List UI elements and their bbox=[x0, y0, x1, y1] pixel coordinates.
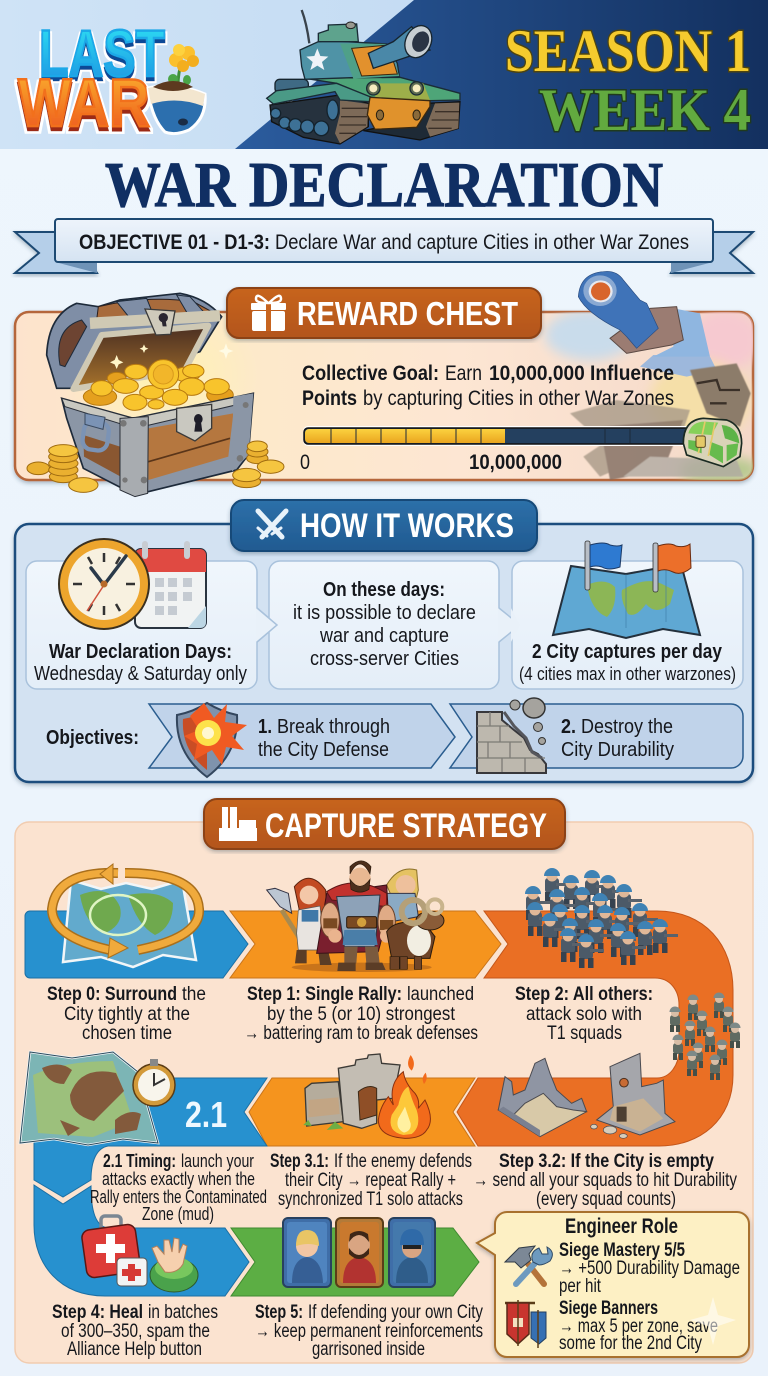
step 2.1 text: Zone (mud) bbox=[142, 1204, 214, 1224]
hero: battering ram bbox=[387, 899, 444, 969]
step 4 text: Alliance Help button bbox=[67, 1339, 202, 1360]
progress bar bbox=[303, 426, 693, 446]
step 1 text: → battering ram to break defenses bbox=[244, 1023, 478, 1044]
heading text: CAPTURE STRATEGY bbox=[265, 807, 547, 845]
icon: open treasure chest bbox=[27, 293, 284, 497]
icon: burning castle bbox=[303, 1054, 430, 1138]
icon: ruined city bbox=[498, 1053, 675, 1138]
step 3.1 text: Step 3.1: bbox=[270, 1151, 329, 1172]
card text: (4 cities max in other warzones) bbox=[519, 664, 736, 684]
arrow: step 0 blue bbox=[25, 911, 248, 978]
header band bbox=[0, 0, 768, 149]
card text bbox=[519, 641, 736, 684]
callout heading: Engineer Role bbox=[565, 1215, 678, 1238]
step 1 text: Step 1: Single Rally: bbox=[247, 984, 402, 1005]
objective text bbox=[79, 231, 689, 254]
heading pill: capture strategy bbox=[204, 799, 565, 849]
step 1 text: launched bbox=[407, 984, 474, 1005]
icon: mini green chest bbox=[683, 418, 742, 467]
logo text LAST: LAST bbox=[39, 16, 165, 90]
hero: blond man bbox=[383, 869, 418, 922]
icon: map with flags bbox=[553, 541, 700, 638]
step 0 text: City tightly at the bbox=[64, 1004, 190, 1025]
panel: how it works bbox=[15, 500, 753, 782]
icon: crumbling wall bbox=[477, 698, 546, 773]
card text: Wednesday & Saturday only bbox=[34, 663, 247, 685]
objective text: OBJECTIVE 01 - D1-3: bbox=[79, 231, 270, 254]
siege banners text: Siege Banners bbox=[559, 1298, 658, 1319]
collective goal text: by capturing Cities in other War Zones bbox=[363, 387, 674, 410]
icon: map with circular arrows bbox=[52, 864, 199, 967]
arrow: destroy durability bbox=[450, 698, 743, 773]
icon: hammer and wrench bbox=[505, 1246, 552, 1284]
icon: siege banners bbox=[505, 1300, 546, 1348]
icon: grey soldiers on the curve bbox=[670, 992, 740, 1080]
step 2 text: Step 2: All others: bbox=[515, 984, 653, 1005]
card text: cross-server Cities bbox=[310, 648, 459, 670]
arrow text: 2. bbox=[561, 716, 576, 738]
step 2 text: T1 squads bbox=[547, 1023, 622, 1044]
arrow: step 2.1 blue bbox=[34, 1078, 267, 1197]
card: war declaration days bbox=[26, 539, 277, 689]
step 2.1 text bbox=[90, 1151, 267, 1224]
card text bbox=[293, 579, 476, 670]
heading text: HOW IT WORKS bbox=[300, 507, 514, 545]
icon: flower bbox=[168, 44, 199, 86]
collective goal text: Collective Goal: bbox=[302, 362, 439, 385]
collective goal text bbox=[302, 362, 674, 410]
card text: war and capture bbox=[319, 625, 449, 647]
step 1 text: by the 5 (or 10) strongest bbox=[267, 1004, 456, 1025]
step 1 text bbox=[244, 984, 478, 1044]
arrow text: City Durability bbox=[561, 739, 674, 761]
step 4 text: of 300–350, spam the bbox=[61, 1321, 210, 1342]
heading text: REWARD CHEST bbox=[297, 295, 518, 332]
header title: week: WEEK 4 bbox=[539, 77, 751, 143]
icon: defender portrait cards bbox=[283, 1218, 435, 1287]
portrait: helmet soldier bbox=[389, 1218, 435, 1287]
portrait: blonde bbox=[283, 1218, 331, 1287]
step 2.1 label: 2.1 bbox=[185, 1094, 227, 1135]
card text: 2 City captures per day bbox=[532, 641, 723, 663]
heading pill: how it works bbox=[231, 500, 537, 551]
step 2 text: attack solo with bbox=[526, 1004, 642, 1025]
progress labels: 10,000,000 bbox=[469, 451, 562, 474]
icon: gift bbox=[251, 296, 286, 331]
step 2.1 text: attacks exactly when the bbox=[102, 1169, 255, 1189]
panel: capture strategy bbox=[15, 799, 753, 1363]
icon: helmet bbox=[148, 81, 205, 134]
hero: red-haired woman with spear bbox=[267, 878, 332, 965]
step 3.1 text: If the enemy defends bbox=[334, 1151, 472, 1172]
icon: crossed swords bbox=[258, 511, 286, 537]
card text: War Declaration Days: bbox=[49, 641, 232, 663]
step 5 text: → keep permanent reinforcements bbox=[255, 1321, 483, 1342]
arrow: step 4 blue bbox=[34, 1185, 249, 1296]
icon: map with stopwatch bbox=[20, 1052, 175, 1145]
icon: calendar bbox=[135, 541, 206, 628]
siege mastery text: Siege Mastery 5/5 bbox=[559, 1240, 685, 1261]
card text: it is possible to declare bbox=[293, 602, 476, 624]
background: blurred landscape bbox=[545, 310, 760, 484]
collective goal text: Points bbox=[302, 387, 357, 410]
card text: On these days: bbox=[323, 579, 445, 601]
arrow text bbox=[258, 716, 390, 761]
step 2 text bbox=[515, 984, 653, 1044]
arrow text: Destroy the bbox=[581, 716, 673, 738]
siege banners text: → max 5 per zone, save bbox=[559, 1316, 718, 1337]
arrow: break through bbox=[149, 703, 455, 777]
portrait: bearded bbox=[336, 1218, 383, 1287]
objective text: Declare War and capture Cities in other War Zones bbox=[275, 231, 689, 254]
card: city captures bbox=[511, 541, 743, 689]
icon: sparkle bbox=[690, 1297, 736, 1345]
heading pill: reward chest bbox=[227, 288, 541, 338]
step 5 text: Step 5: bbox=[255, 1302, 303, 1323]
hero: bearded warrior bbox=[317, 861, 395, 971]
arrow text: the City Defense bbox=[258, 739, 389, 761]
step 5 text: If defending your own City bbox=[308, 1302, 483, 1323]
collective goal text: Earn bbox=[445, 362, 482, 385]
progress labels: 0 bbox=[300, 451, 310, 474]
siege mastery text: per hit bbox=[559, 1276, 602, 1297]
icon: heroes and ram bbox=[267, 861, 444, 972]
siege mastery text bbox=[559, 1240, 740, 1297]
siege banners text bbox=[559, 1298, 718, 1354]
card text bbox=[34, 641, 247, 685]
icon: tank cannon scene bbox=[570, 271, 751, 480]
arrow: step 1 orange bbox=[230, 911, 501, 978]
step 4 text: Step 4: Heal bbox=[52, 1302, 143, 1323]
step 0 text: Step 0: Surround bbox=[47, 984, 177, 1005]
step 3.1 text bbox=[270, 1151, 472, 1210]
icon: soldier crowd bbox=[525, 868, 678, 968]
objective ribbon bbox=[15, 219, 753, 273]
label: objectives: Objectives: bbox=[46, 727, 139, 749]
step 2.1 text: Rally enters the Contaminated bbox=[90, 1187, 267, 1207]
step 3.1 text: synchronized T1 solo attacks bbox=[278, 1189, 463, 1210]
icon: city skyline bbox=[219, 807, 257, 841]
collective goal text: 10,000,000 Influence bbox=[489, 362, 674, 385]
step 2.1 text: launch your bbox=[181, 1151, 254, 1171]
step 4 text: in batches bbox=[148, 1302, 218, 1323]
arrow: step 3.1 orange bbox=[249, 1078, 475, 1146]
arrow text bbox=[561, 716, 674, 761]
step 4 text bbox=[52, 1302, 218, 1360]
step 0 text: chosen time bbox=[82, 1023, 172, 1044]
step 3.1 text: their City → repeat Rally + bbox=[285, 1170, 456, 1191]
main title: WAR DECLARATION bbox=[105, 149, 663, 220]
step 5 text bbox=[255, 1302, 483, 1360]
logo: Last War bbox=[18, 16, 205, 141]
siege banners text: some for the 2nd City bbox=[559, 1333, 702, 1354]
card: on these days bbox=[257, 561, 520, 689]
arrow text: 1. bbox=[258, 716, 272, 738]
step 5 text: garrisoned inside bbox=[312, 1339, 425, 1360]
step 2.1 text: 2.1 Timing: bbox=[103, 1151, 176, 1171]
icon: tank bbox=[267, 10, 460, 144]
progress labels bbox=[300, 451, 562, 474]
icon: clock bbox=[59, 539, 149, 629]
arrow: step 5 green bbox=[231, 1228, 479, 1296]
callout: engineer role bbox=[477, 1212, 749, 1357]
step 0 text bbox=[47, 984, 206, 1044]
step 3.2 text: Step 3.2: If the City is empty bbox=[499, 1151, 714, 1172]
step 3.2 text: (every squad counts) bbox=[536, 1189, 676, 1210]
icon: shield with explosion bbox=[177, 703, 247, 777]
step 0 text: the bbox=[182, 984, 206, 1005]
icon: medical kits and help button bbox=[81, 1216, 198, 1292]
logo text WAR: WAR bbox=[18, 65, 150, 141]
panel: reward chest bbox=[15, 271, 760, 497]
arrow: step 2 curved band bbox=[457, 911, 733, 1146]
step 3.2 text bbox=[473, 1151, 737, 1210]
arrow text: Break through bbox=[277, 716, 390, 738]
